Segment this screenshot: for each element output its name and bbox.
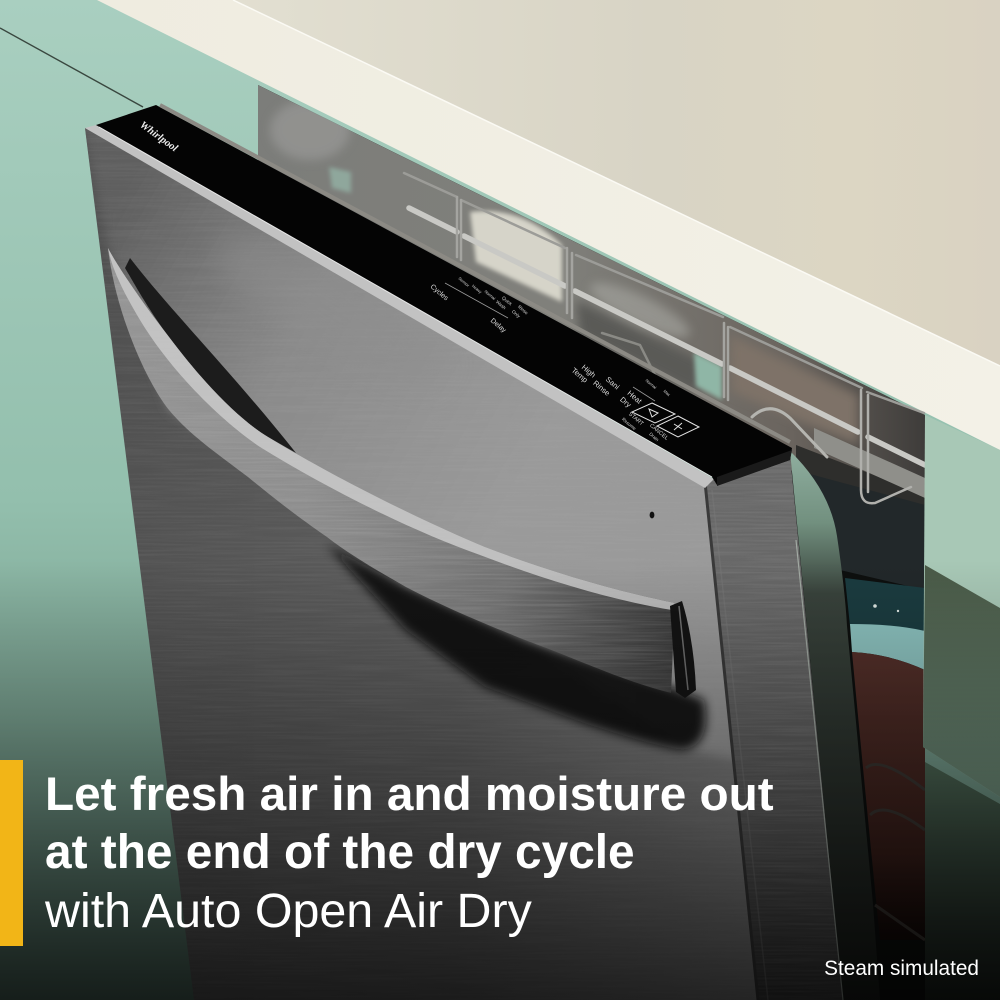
panel labels: Max xyxy=(662,389,671,397)
door sensor dot xyxy=(650,512,654,518)
dishwasher cavity with steam xyxy=(250,80,930,1000)
subheading: with Auto Open Air Dry xyxy=(44,884,533,938)
panel labels: Rinse xyxy=(517,304,529,316)
footnote: Steam simulated xyxy=(824,957,979,980)
panel labels: Temp xyxy=(570,366,590,384)
panel labels: CANCEL xyxy=(648,423,669,442)
panel labels xyxy=(429,276,671,443)
door front panel xyxy=(80,110,770,1000)
countertop xyxy=(97,0,1000,450)
headline: Let fresh air in and moisture out xyxy=(45,768,774,821)
control panel xyxy=(96,105,792,486)
accent bar xyxy=(0,760,23,946)
panel labels: Normal xyxy=(483,289,497,301)
panel labels: Heat xyxy=(626,389,644,406)
panel labels: Heavy xyxy=(471,283,483,294)
panel labels: Dry xyxy=(618,395,633,409)
panel labels: Delay xyxy=(489,317,507,335)
panel labels: Cycles xyxy=(429,283,450,303)
bottom darkening overlay xyxy=(0,560,1000,1000)
headline xyxy=(44,768,774,938)
brown plate xyxy=(852,652,925,940)
door inner edge xyxy=(790,451,880,1000)
panel labels: Wash xyxy=(495,299,507,311)
panel labels: High xyxy=(580,363,597,379)
bright plate xyxy=(470,211,562,302)
panel labels: START xyxy=(627,411,645,428)
interior dark wall xyxy=(811,474,924,588)
lower rack xyxy=(866,764,925,940)
panel labels: Only xyxy=(511,309,522,319)
right cabinet: lower door xyxy=(925,762,1000,1000)
door side panel xyxy=(707,460,844,1000)
panel labels: Sensor xyxy=(457,276,471,288)
handle xyxy=(100,240,700,700)
dish rack xyxy=(404,173,925,503)
logo: Whirlpool xyxy=(138,120,179,154)
right cabinet: upper door xyxy=(923,415,1000,797)
start button xyxy=(632,403,675,423)
panel labels: Quick xyxy=(501,295,514,307)
cancel button xyxy=(657,416,699,437)
panel labels: Normal xyxy=(644,378,658,390)
handle recess shadow xyxy=(125,258,296,453)
panel labels: Rinse xyxy=(591,378,612,398)
door top trim xyxy=(85,125,714,488)
handle end cap xyxy=(670,601,696,698)
panel labels: Sani xyxy=(604,375,622,392)
panel labels: Resume xyxy=(621,417,637,431)
headline: at the end of the dry cycle xyxy=(45,826,635,879)
wall panel seam xyxy=(0,28,143,107)
handle drop shadow xyxy=(327,545,706,750)
teal plate xyxy=(850,624,925,670)
panel labels: Drain xyxy=(648,431,660,443)
